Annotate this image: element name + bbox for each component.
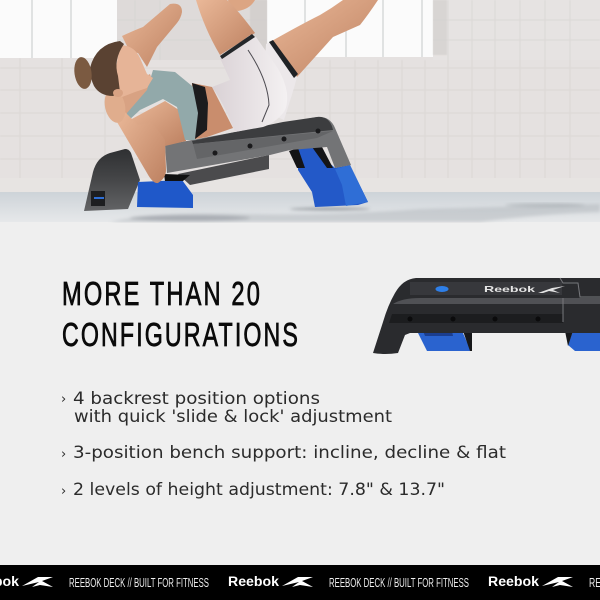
brand logo 1 <box>0 574 53 589</box>
raised arm <box>122 4 182 67</box>
ear <box>113 89 123 97</box>
brand logo 3: Reebok <box>488 574 539 589</box>
blue support: rear <box>298 147 368 207</box>
woman <box>72 0 378 183</box>
bullet 2: › <box>61 447 66 462</box>
heading line 1: MORE THAN 20 <box>62 275 262 312</box>
heading line 2: CONFIGURATIONS <box>62 316 300 353</box>
shorts <box>212 35 287 132</box>
footer brand strip <box>0 565 600 600</box>
brand logo 2 <box>228 574 313 589</box>
tagline 1: REEBOK DECK // BUILT FOR FITNESS <box>69 575 209 590</box>
blue support: front <box>137 180 193 208</box>
bullet 3: › <box>61 484 66 499</box>
chest skin <box>130 101 186 146</box>
bullet 1: › <box>61 392 66 407</box>
bench <box>84 117 368 211</box>
tagline 2: REEBOK DECK // BUILT FOR FITNESS <box>329 575 469 590</box>
black deck body <box>373 278 600 354</box>
bullet 2: 3-position bench support: incline, decline & flat <box>73 443 506 463</box>
torso skin <box>190 83 233 140</box>
neck <box>118 74 152 118</box>
lower hand <box>102 87 128 125</box>
far leg <box>270 0 378 77</box>
heading <box>62 275 300 353</box>
black band <box>192 83 208 139</box>
rear lower panel <box>178 155 269 185</box>
windows <box>0 0 447 60</box>
bullet 3: 2 levels of height adjustment: 7.8" & 13.7" <box>73 480 445 500</box>
near thigh <box>196 0 255 55</box>
hair bun <box>72 56 94 90</box>
far shorts <box>262 41 297 120</box>
bullet list <box>61 389 506 500</box>
bench top <box>165 117 351 173</box>
lower arm <box>117 112 166 183</box>
blue feet <box>417 331 471 351</box>
blue dot <box>436 286 448 292</box>
top: grey-teal bra <box>127 70 199 140</box>
face <box>112 45 153 97</box>
brand logo 2: Reebok <box>228 574 279 589</box>
hair <box>90 41 124 96</box>
bullet 1: 4 backrest position options <box>73 389 320 409</box>
gym wall background <box>0 0 600 222</box>
brand logo 3 <box>488 574 573 589</box>
floor <box>0 192 600 222</box>
product image: deck side view <box>373 278 600 354</box>
bullet 1: with quick 'slide & lock' adjustment <box>74 407 392 427</box>
bench end block <box>84 149 140 211</box>
deck logo: Reebok <box>484 284 535 294</box>
bullet 1 <box>61 389 392 427</box>
hero photo: woman on bench <box>0 0 600 222</box>
